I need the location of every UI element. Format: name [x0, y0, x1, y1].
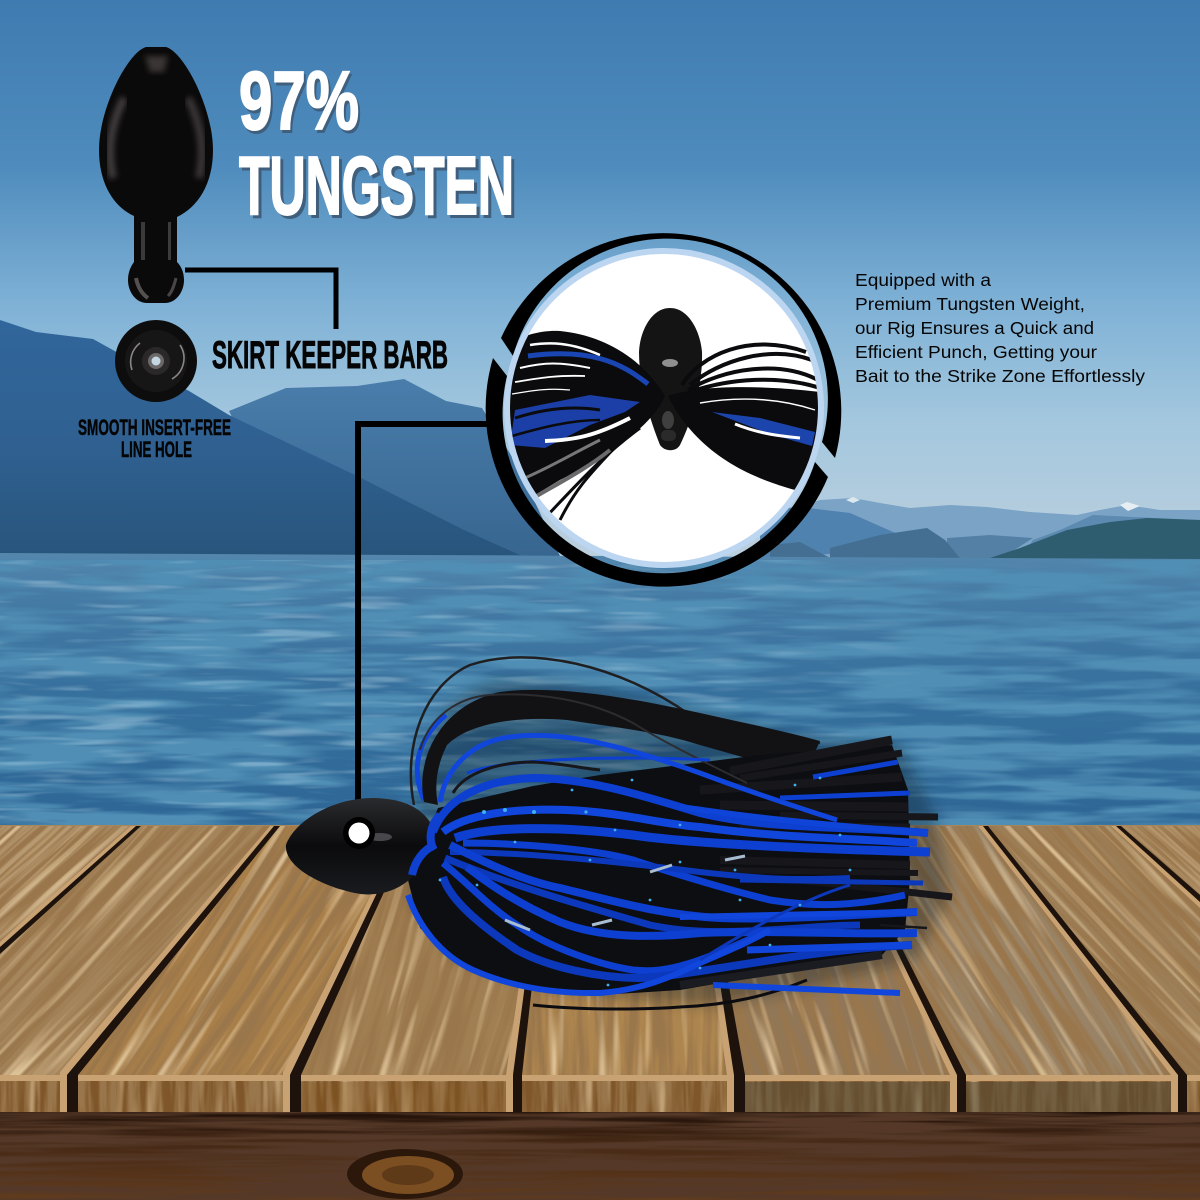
dock: plank front faces	[0, 1075, 1200, 1112]
lure: thin black strand over bundle	[420, 694, 747, 783]
dock: deck planks	[0, 825, 1200, 1077]
connector line: inset to jig head	[358, 424, 490, 822]
background: distant mountains right	[760, 497, 1200, 560]
background: sky	[0, 0, 1200, 560]
lure: jig head	[286, 798, 432, 894]
description text: our Rig Ensures a Quick and	[855, 318, 1094, 338]
inset: jig head	[639, 308, 702, 450]
label: skirt keeper barb: SKIRT KEEPER BARB	[212, 334, 448, 377]
callout: inset magnifier circle	[486, 233, 841, 587]
lure: skirt backing	[408, 745, 910, 995]
label: smooth insert-free line hole: LINE HOLE	[121, 437, 192, 462]
description text: Equipped with a	[855, 270, 991, 290]
lure: thin top loop	[411, 657, 820, 805]
background: lake water	[0, 553, 1200, 827]
heading: 97% tungsten: TUNGSTEN	[239, 139, 514, 232]
lure: black strands	[533, 740, 952, 1009]
icon: tungsten weight side view	[99, 47, 213, 303]
lure: skirt shadow	[410, 680, 950, 1005]
icon: line hole end view	[115, 320, 197, 402]
lure: top black bundle	[422, 690, 820, 805]
dock: front beam	[0, 1112, 1200, 1200]
callout marker on jig head	[343, 817, 375, 849]
description text	[855, 270, 1145, 386]
heading: 97% tungsten: 97%	[239, 54, 359, 147]
lure: blue strands	[408, 735, 930, 993]
label: smooth insert-free line hole	[78, 415, 231, 462]
lure: outer blue strand	[417, 715, 446, 800]
inset: right skirt fan	[668, 344, 825, 490]
description text: Bait to the Strike Zone Effortlessly	[855, 366, 1145, 386]
lure: pale gaps between strands	[505, 856, 745, 930]
heading: 97% tungsten: 97%	[241, 57, 361, 150]
background: large mountains left	[0, 320, 560, 556]
label: smooth insert-free line hole: SMOOTH INSERT-FREE	[78, 415, 231, 440]
inset: left skirt fan	[505, 331, 665, 520]
heading: 97% tungsten: TUNGSTEN	[242, 142, 517, 235]
heading: 97% tungsten	[239, 54, 517, 235]
connector line: barb to label	[185, 270, 336, 329]
lure: skirt collar	[412, 815, 440, 875]
lure: glitter flakes	[439, 777, 851, 986]
description text: Efficient Punch, Getting your	[855, 342, 1097, 362]
description text: Premium Tungsten Weight,	[855, 294, 1085, 314]
dock: plank gaps	[0, 826, 1200, 1112]
product: jig lure	[286, 657, 952, 1009]
